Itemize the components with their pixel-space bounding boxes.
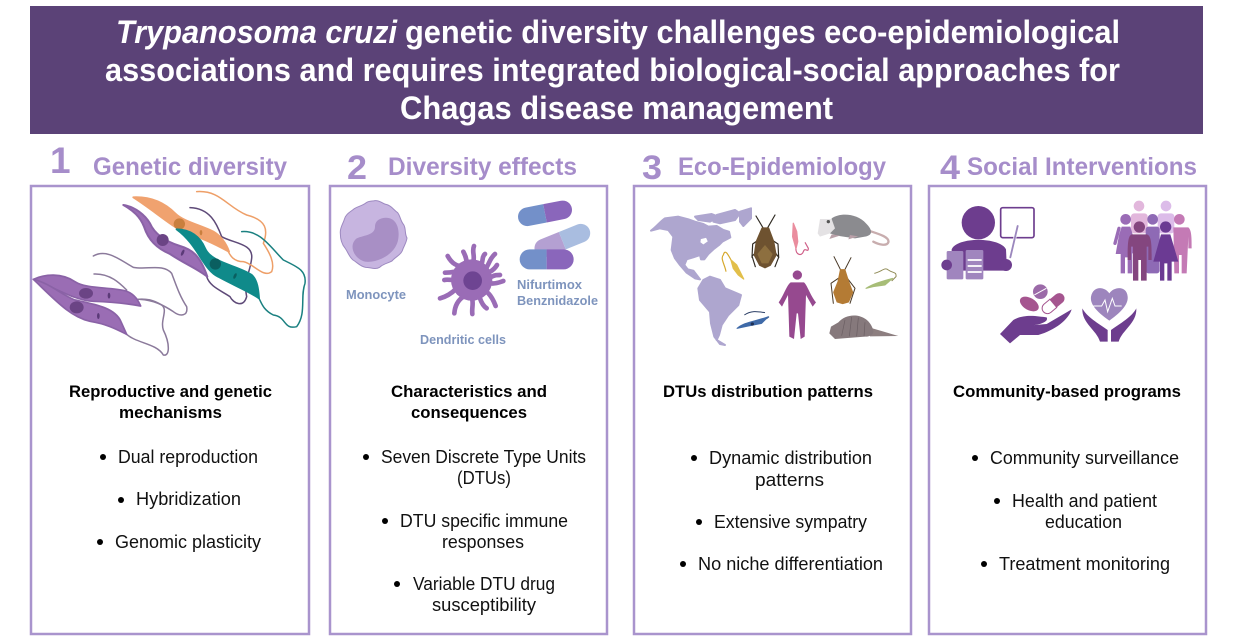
heading: 4 Social Interventions: Social Interventions: [967, 153, 1197, 181]
list: genetic diversity mechanisms: [97, 447, 261, 552]
title banner: Trypanosoma cruzi: [116, 14, 398, 50]
title banner: genetic diversity challenges eco-epidemiological: [405, 14, 1120, 50]
icon: yellow trypanosome: [722, 252, 744, 279]
title banner: associations and requires integrated biological-social approaches for: [105, 52, 1120, 88]
label: dendritic cells: Dendritic cells: [420, 333, 506, 347]
heading: 2 Diversity effects: Diversity effects: [388, 153, 577, 181]
list: diversity consequences: Variable DTU drug: [413, 574, 555, 594]
icon: triatomine bug, orange: [831, 257, 855, 303]
label: monocyte: Monocyte: [346, 288, 406, 302]
icon: map of the Americas: [651, 208, 751, 345]
list: community interventions: Health and patient: [1012, 491, 1157, 511]
list: community interventions: Community surveillance: [990, 448, 1179, 468]
panel: genetic diversity: [31, 186, 309, 634]
heading: 4 Social Interventions: [940, 149, 1197, 187]
panel: diversity effects: [330, 186, 607, 634]
list: diversity consequences: susceptibility: [432, 595, 536, 615]
heading: 2 Diversity effects: [347, 149, 577, 187]
list: genetic diversity mechanisms: Genomic plasticity: [115, 532, 261, 552]
heading: 3 Eco-Epidemiology: Eco-Epidemiology: [678, 153, 886, 181]
text: characteristics and consequences: Characteristics and: [391, 382, 547, 401]
list: distribution characteristics: Dynamic distribution: [709, 448, 872, 468]
icon: hand holding pills: [1000, 284, 1072, 343]
heading: 1 Genetic diversity: 1: [50, 140, 71, 181]
list: distribution characteristics: No niche differentiation: [698, 554, 883, 574]
list: diversity consequences: DTU specific immune: [400, 511, 568, 531]
title banner: [30, 6, 1203, 134]
list: community interventions: [972, 448, 1179, 574]
list: distribution characteristics: Extensive sympatry: [714, 512, 867, 532]
icon: human figure: [779, 270, 816, 339]
icon: armadillo: [829, 315, 898, 339]
icon: dendritic cell: [440, 246, 503, 314]
list: distribution characteristics: patterns: [755, 470, 824, 490]
text: community-based programs: Community-based programs: [953, 382, 1181, 401]
label: nifurtimox benznidazole: [517, 278, 598, 308]
list: diversity consequences: responses: [442, 532, 524, 552]
list: distribution characteristics: [680, 448, 883, 574]
icon: drug capsules: [516, 199, 593, 269]
icon: monocyte: [340, 201, 407, 269]
text: reproductive and genetic mechanisms: mechanisms: [119, 403, 222, 422]
label: nifurtimox benznidazole: Nifurtimox: [517, 278, 582, 292]
icon: opossum: [818, 215, 888, 245]
icon: pink trypanosome: [793, 223, 808, 254]
heading: 1 Genetic diversity: Genetic diversity: [93, 153, 287, 181]
heading: 1 Genetic diversity: [50, 140, 287, 181]
text: reproductive and genetic mechanisms: Reproductive and genetic: [69, 382, 272, 401]
text: characteristics and consequences: consequences: [411, 403, 527, 422]
list: genetic diversity mechanisms: Dual reproduction: [118, 447, 258, 467]
list: diversity consequences: Seven Discrete Type Units: [381, 447, 586, 467]
icon: heart in caring hands: [1082, 288, 1136, 342]
list: genetic diversity mechanisms: Hybridization: [136, 489, 241, 509]
title banner: Chagas disease management: [400, 90, 833, 126]
heading: 3 Eco-Epidemiology: [642, 149, 886, 187]
icon: green trypanosome: [866, 269, 896, 288]
icon: triatomine bug, brown: [752, 215, 779, 267]
text: characteristics and consequences: [391, 382, 547, 422]
heading: 2 Diversity effects: 2: [347, 149, 367, 187]
list: diversity consequences: [363, 447, 586, 615]
heading: 4 Social Interventions: 4: [940, 149, 960, 187]
panel: social interventions: [929, 186, 1206, 634]
icon: educator with board and book: [941, 206, 1034, 279]
list: community interventions: education: [1045, 512, 1122, 532]
text: DTUs distribution patterns: DTUs distribution patterns: [663, 382, 873, 401]
label: nifurtimox benznidazole: Benznidazole: [517, 294, 598, 308]
icon: community group: [1115, 201, 1192, 281]
icon: trypanosomes: [33, 192, 305, 355]
list: community interventions: Treatment monitoring: [999, 554, 1170, 574]
list: diversity consequences: (DTUs): [457, 468, 511, 488]
heading: 3 Eco-Epidemiology: 3: [642, 149, 662, 187]
text: reproductive and genetic mechanisms: [69, 382, 272, 422]
icon: blue trypanosome: [737, 312, 769, 328]
panel: eco-epidemiology: [634, 186, 911, 634]
